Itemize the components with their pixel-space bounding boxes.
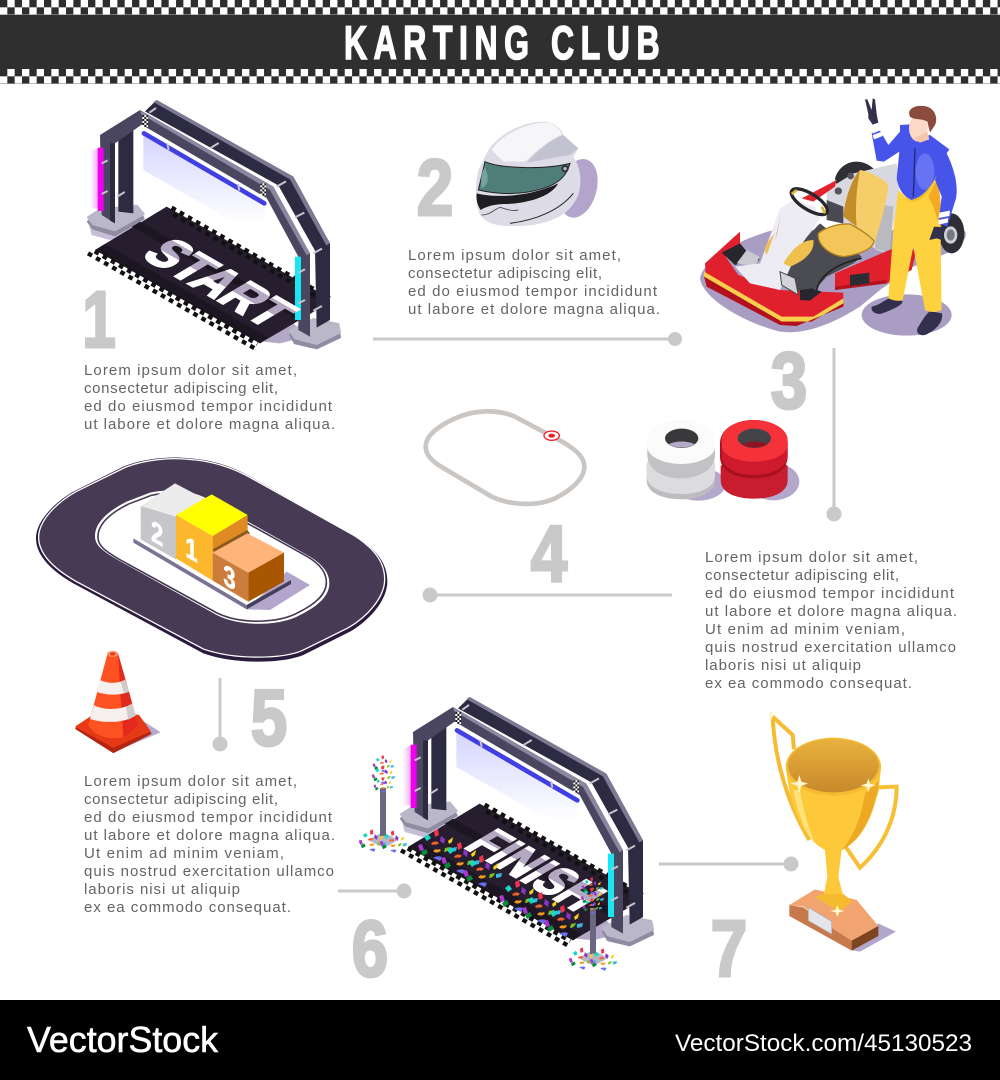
step 3 bbox=[213, 533, 284, 602]
text block 5: consectetur adipiscing elit, bbox=[84, 791, 278, 808]
text block 5: quis nostrud exercitation ullamco bbox=[84, 863, 334, 880]
number 2: 2 bbox=[417, 143, 453, 232]
sparkles bbox=[767, 710, 876, 917]
text block 5: laboris nisi ut aliquip bbox=[84, 881, 240, 898]
url text: VectorStock.com/45130523 bbox=[675, 1030, 972, 1057]
footer watermark bar bbox=[0, 1000, 1000, 1080]
podium: 3 bbox=[223, 557, 236, 597]
header banner bbox=[0, 0, 1000, 84]
text block 5 bbox=[84, 773, 335, 916]
text block 4: Lorem ipsum dolor sit amet, bbox=[705, 549, 918, 566]
icon: small track map bbox=[426, 411, 584, 504]
title: KARTING CLUB bbox=[344, 17, 660, 70]
cup rim bbox=[786, 738, 881, 796]
text block 4: consectetur adipiscing elit, bbox=[705, 567, 899, 584]
track bbox=[36, 457, 387, 662]
finish lettering: FINISH bbox=[453, 822, 619, 918]
number 3: 3 bbox=[771, 336, 807, 425]
icon: tyres bbox=[647, 420, 799, 501]
trophy base bbox=[789, 889, 878, 951]
number 1: 1 bbox=[82, 275, 116, 364]
base shadow bbox=[850, 923, 896, 952]
text block 4: ed do eiusmod tempor incididunt bbox=[705, 585, 955, 602]
rear wheels bbox=[835, 162, 964, 253]
text block 2: consectetur adipiscing elit, bbox=[408, 265, 602, 282]
torso bbox=[872, 124, 957, 227]
text block 5: Lorem ipsum dolor sit amet, bbox=[84, 773, 297, 790]
podium: 1 bbox=[185, 529, 198, 569]
number 4: 4 bbox=[531, 509, 568, 598]
icon: traffic cone bbox=[77, 651, 161, 752]
text block 4 bbox=[705, 549, 957, 692]
number 7: 7 bbox=[711, 904, 747, 993]
confetti on the mat bbox=[418, 829, 583, 937]
icon: helmet bbox=[476, 122, 604, 226]
illustration: trophy bbox=[767, 710, 897, 952]
text block 1: ed do eiusmod tempor incididunt bbox=[84, 398, 333, 415]
text block 5: ex ea commodo consequat. bbox=[84, 899, 291, 916]
number 5: 5 bbox=[251, 673, 287, 762]
connector lines bbox=[212, 332, 842, 898]
number 6: 6 bbox=[352, 904, 388, 993]
text block 1: Lorem ipsum dolor sit amet, bbox=[84, 362, 297, 379]
red tyres bbox=[720, 420, 788, 499]
front bumper bbox=[705, 232, 843, 325]
text block 1: consectetur adipiscing elit, bbox=[84, 380, 278, 397]
text block 4: quis nostrud exercitation ullamco bbox=[705, 639, 956, 656]
illustration: start gate bbox=[88, 100, 340, 348]
steering wheel bbox=[788, 184, 831, 219]
illustration: finish gate bbox=[359, 697, 653, 971]
head bbox=[909, 115, 928, 142]
podium bbox=[133, 483, 310, 610]
nose bbox=[735, 200, 820, 290]
text block 5: ut labore et dolore magna aliqua. bbox=[84, 827, 335, 844]
text block 4: ut labore et dolore magna aliqua. bbox=[705, 603, 957, 620]
text block 4: laboris nisi ut aliquip bbox=[705, 657, 861, 674]
start lettering: START bbox=[130, 231, 310, 335]
text block 5: Ut enim ad minim veniam, bbox=[84, 845, 284, 862]
text block 2: ut labore et dolore magna aliqua. bbox=[408, 301, 660, 318]
text block 4: Ut enim ad minim veniam, bbox=[705, 621, 905, 638]
text block 2: ed do eiusmod tempor incididunt bbox=[408, 283, 658, 300]
confetti post right bbox=[569, 877, 617, 971]
podium: 2 bbox=[151, 513, 163, 553]
cup body bbox=[786, 767, 881, 850]
white tyres bbox=[647, 421, 715, 499]
engine block bbox=[827, 163, 900, 253]
step 2 bbox=[141, 483, 207, 559]
text block 2 bbox=[408, 247, 660, 318]
shoes bbox=[872, 297, 903, 314]
text block 5: ed do eiusmod tempor incididunt bbox=[84, 809, 333, 826]
illustration: kart and driver bbox=[700, 98, 966, 336]
text block 1 bbox=[84, 362, 335, 433]
confetti post left bbox=[359, 755, 407, 853]
stem bbox=[823, 850, 843, 897]
shadow bbox=[700, 230, 966, 332]
hands bbox=[865, 98, 878, 125]
legs bbox=[888, 180, 942, 312]
floor pan bbox=[775, 223, 862, 295]
handles bbox=[773, 717, 809, 840]
text block 1: ut labore et dolore magna aliqua. bbox=[84, 416, 335, 433]
step 1 bbox=[176, 494, 248, 581]
feet shadow bbox=[862, 294, 952, 336]
rear red side bbox=[802, 180, 837, 202]
text block 2: Lorem ipsum dolor sit amet, bbox=[408, 247, 621, 264]
text block 4: ex ea commodo consequat. bbox=[705, 675, 912, 692]
illustration: race track with podium bbox=[36, 457, 387, 662]
seat bbox=[818, 170, 888, 257]
logo text: VectorStock bbox=[27, 1019, 219, 1060]
driver bbox=[865, 98, 957, 335]
